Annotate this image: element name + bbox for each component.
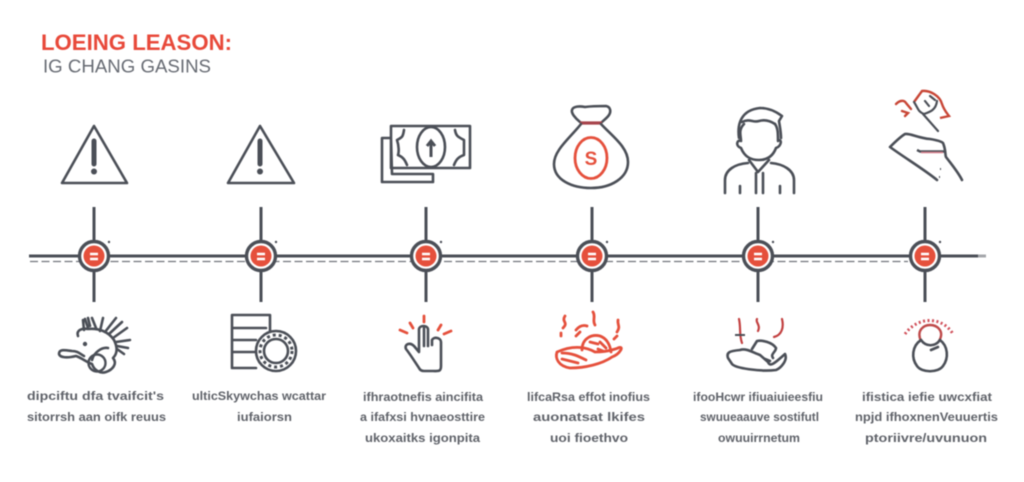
icon: banknotes — [382, 126, 470, 182]
caption 3: ukoxaitks igonpita — [365, 431, 480, 445]
caption 6: ptoriivre/uvunuon — [865, 431, 987, 445]
node 1 — [80, 207, 110, 302]
icon: person — [725, 108, 794, 193]
caption 5 — [693, 390, 823, 445]
icon: chip stack — [232, 315, 296, 371]
caption 4: auonatsat lkifes — [533, 410, 645, 424]
icon: red hand with coin — [556, 312, 621, 368]
caption 3: ifhraotnefis aincifita — [363, 390, 483, 404]
caption 1: sitorrsh aan oifk reuus — [27, 410, 166, 424]
caption 2: iufaiorsn — [237, 410, 292, 424]
icon: hand tap — [400, 316, 451, 371]
caption 1 — [27, 389, 166, 424]
caption 4: lifcaRsa effot inofius — [527, 390, 650, 404]
timeline axis — [29, 256, 986, 262]
caption 2: ulticSkywchas wcattar — [192, 389, 326, 403]
icon: hand with flower — [890, 91, 962, 180]
title: LOEING LEASON: — [41, 30, 232, 55]
caption 2 — [192, 389, 326, 424]
caption 6 — [855, 390, 998, 445]
caption 5: swuueaauve sostifutl — [700, 410, 819, 424]
caption 5: owuuirrnetum — [718, 431, 800, 445]
node 6 — [910, 207, 941, 302]
caption 3 — [360, 390, 485, 445]
node 2 — [246, 207, 277, 302]
caption 4 — [527, 390, 650, 445]
icon: spiky creature — [59, 318, 130, 373]
node 3 — [412, 207, 442, 302]
icon: warning triangle 1 — [62, 126, 127, 183]
subtitle: IG CHANG GASINS — [43, 56, 211, 76]
node 5 — [744, 207, 774, 302]
caption 4: uoi fioethvo — [550, 431, 628, 445]
caption 3: a ifafxsi hvnaeosttire — [360, 410, 485, 424]
icon: warning triangle 2 — [228, 126, 294, 183]
icon: hand with steam — [728, 319, 786, 371]
caption 5: ifooHcwr ifiuaiuieesfiu — [693, 390, 823, 404]
caption 6: npjd ifhoxnenVeuuertis — [855, 410, 998, 424]
caption 1: dipciftu dfa tvaifcit's — [27, 389, 164, 403]
icon: money bag: S — [585, 149, 597, 170]
node 4 — [578, 207, 608, 302]
icon: money bag — [554, 106, 628, 188]
caption 6: ifistica iefie uwcxfiat — [862, 390, 992, 404]
icon: head with arc — [905, 320, 953, 371]
